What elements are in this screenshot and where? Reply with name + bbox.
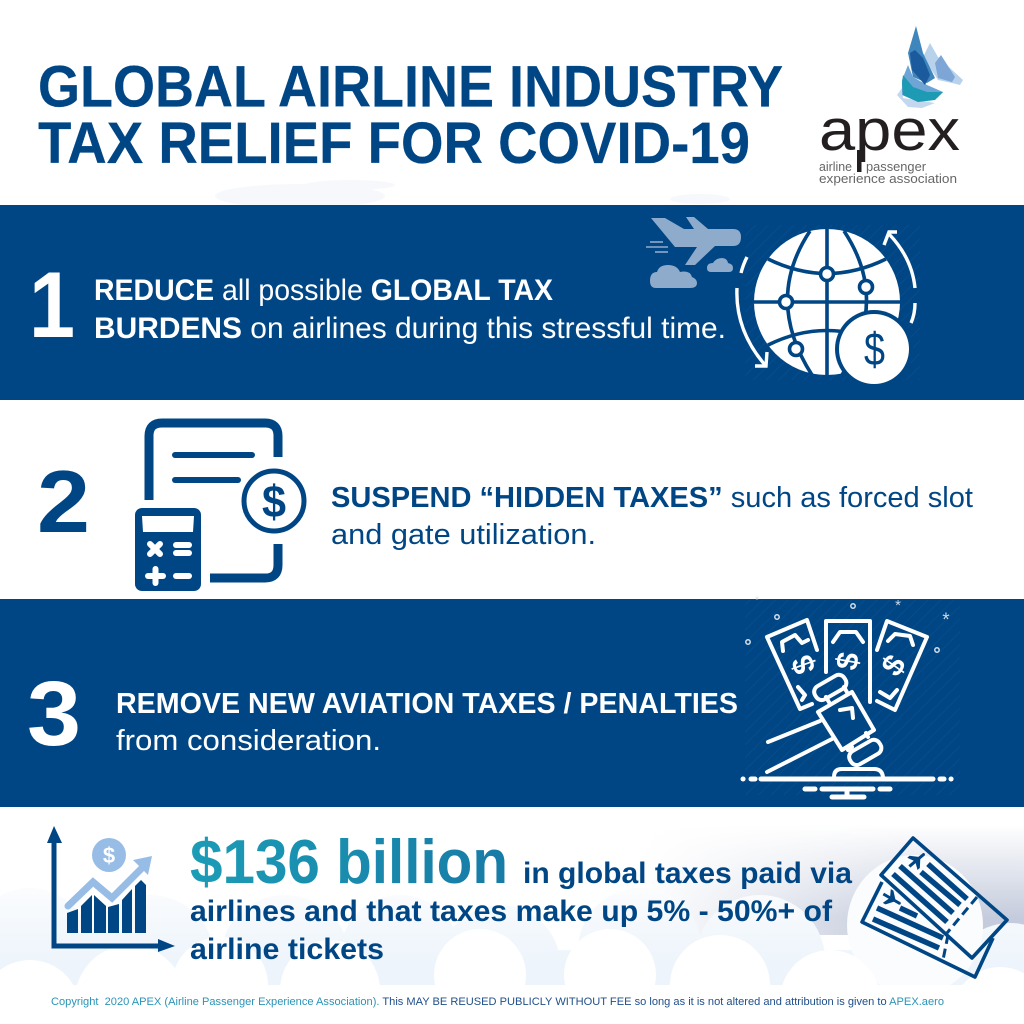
step 1 text: BURDENS on airlines during this stressful time. <box>94 312 726 345</box>
panel: bottom statistic <box>0 807 1024 1024</box>
icon: growth chart with dollar coin: $ <box>103 843 115 868</box>
logo wordmark: apex <box>819 98 960 163</box>
icon: globe with dollar coin <box>737 225 920 388</box>
header panel <box>38 26 963 208</box>
logo tagline <box>819 159 957 186</box>
icon: gavel and banknotes: $ <box>829 650 866 673</box>
APEX logo <box>819 26 963 186</box>
statistic text: airline tickets <box>190 933 384 966</box>
statistic text <box>190 828 852 966</box>
logo tagline: airline <box>819 159 852 174</box>
icon: growth chart with dollar coin <box>47 826 175 952</box>
icon: airplane and clouds <box>646 217 741 288</box>
background clouds <box>0 807 1024 1024</box>
step number 3: 3 <box>27 663 81 765</box>
step 2 text: SUSPEND “HIDDEN TAXES” such as forced slot <box>331 482 973 514</box>
step number 1: 1 <box>29 252 75 357</box>
logo sails <box>897 26 963 108</box>
step number 2: 2 <box>37 452 90 551</box>
step 1 text <box>94 274 726 345</box>
icon: airline tickets <box>862 838 1007 977</box>
statistic text: $136 billion <box>190 828 508 897</box>
icon: globe with dollar coin: $ <box>864 323 885 375</box>
title <box>38 54 783 176</box>
icon: gavel and banknotes: * <box>895 597 901 614</box>
step 2 text: and gate utilization. <box>331 519 596 551</box>
copyright footer: Copyright 2020 APEX (Airline Passenger Experience Association). This MAY BE REUSED PUBLICLY WITHOUT FEE so long as it is not altered and attribution is given to APEX.aero <box>51 996 944 1008</box>
title: GLOBAL AIRLINE INDUSTRY <box>38 54 783 120</box>
step 3 text <box>116 688 738 757</box>
panel: step 3 <box>0 595 1024 807</box>
icon: gavel and banknotes: $ <box>874 648 913 682</box>
icon: gavel and banknotes: * <box>942 610 950 631</box>
icon: tax document and calculator: $ <box>262 476 286 527</box>
icon: gavel and banknotes: $ <box>784 651 823 679</box>
step 1 text: REDUCE all possible GLOBAL TAX <box>94 274 553 307</box>
panel: step 1 <box>0 205 1024 400</box>
step 3 text: REMOVE NEW AVIATION TAXES / PENALTIES <box>116 688 738 720</box>
logo tagline: passenger <box>866 159 927 174</box>
icon: tax document and calculator <box>135 423 304 591</box>
step 3 text: from consideration. <box>116 725 381 757</box>
icon: gavel and banknotes <box>743 595 960 797</box>
statistic text: airlines and that taxes make up 5% - 50%+ of <box>190 895 833 928</box>
title: TAX RELIEF FOR COVID-19 <box>38 111 750 176</box>
logo tagline: experience association <box>819 171 957 186</box>
header background clouds <box>215 180 730 208</box>
panel: step 2 <box>37 423 973 591</box>
statistic text: in global taxes paid via <box>523 857 852 890</box>
icon: gavel and banknotes: * <box>755 595 759 605</box>
step 2 text <box>331 482 973 551</box>
